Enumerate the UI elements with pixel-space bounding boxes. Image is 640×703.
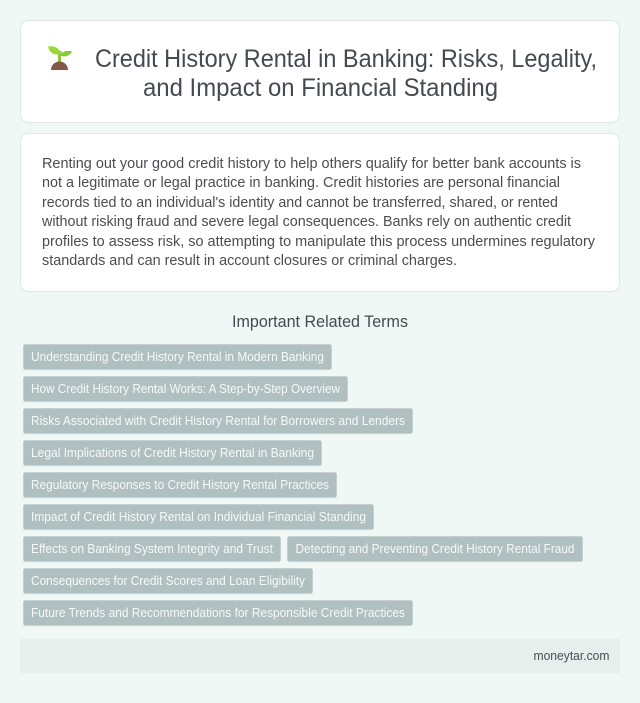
tag 7 — [24, 536, 280, 562]
title: Credit History Rental in Banking: Risks, Legality, — [95, 45, 597, 73]
panel: description: Renting out your good credit history to help others qualify for better bank accounts is — [42, 156, 581, 172]
panel: description: records tied to an individual's identity and cannot be transferred, shared, or rented — [42, 195, 558, 211]
tag 6 — [24, 504, 374, 530]
title: and Impact on Financial Standing — [143, 74, 498, 102]
tag 5 — [24, 472, 336, 498]
panel: description: standards and can result in account closures or criminal charges. — [42, 253, 457, 269]
panel: description: not a legitimate or legal practice in banking. Credit histories are personal financial — [42, 175, 560, 191]
tag 2 — [24, 376, 348, 402]
tag 10 — [24, 600, 412, 626]
tag 5: Regulatory Responses to Credit History Rental Practices — [31, 478, 329, 492]
tag 10: Future Trends and Recommendations for Responsible Credit Practices — [31, 606, 405, 620]
tag 6: Impact of Credit History Rental on Individual Financial Standing — [31, 510, 366, 524]
tag 3 — [24, 408, 412, 434]
tag list — [24, 344, 582, 626]
title — [95, 45, 597, 102]
icon: sprout — [48, 46, 72, 70]
footer — [20, 639, 620, 673]
tag 8 — [288, 536, 582, 562]
panel: description — [20, 134, 620, 292]
panel: description: profiles to assess risk, so attempting to manipulate this process undermines regulatory — [42, 234, 596, 250]
tag 4: Legal Implications of Credit History Rental in Banking — [31, 446, 314, 460]
tag 2: How Credit History Rental Works: A Step-by-Step Overview — [31, 382, 341, 396]
heading: important related terms: Important Related Terms — [232, 313, 408, 331]
tag 4 — [24, 440, 322, 466]
footer: moneytar.com — [534, 649, 610, 663]
tag 1: Understanding Credit History Rental in Modern Banking — [31, 350, 324, 364]
header panel — [20, 20, 620, 122]
tag 1 — [24, 344, 332, 370]
tag 9 — [24, 568, 312, 594]
tag 7: Effects on Banking System Integrity and Trust — [31, 542, 273, 556]
tag 8: Detecting and Preventing Credit History Rental Fraud — [296, 542, 575, 556]
tag 9: Consequences for Credit Scores and Loan Eligibility — [31, 574, 306, 588]
tag 3: Risks Associated with Credit History Rental for Borrowers and Lenders — [31, 414, 405, 428]
panel: description: without risking fraud and severe legal consequences. Banks rely on authentic credit — [41, 214, 571, 230]
